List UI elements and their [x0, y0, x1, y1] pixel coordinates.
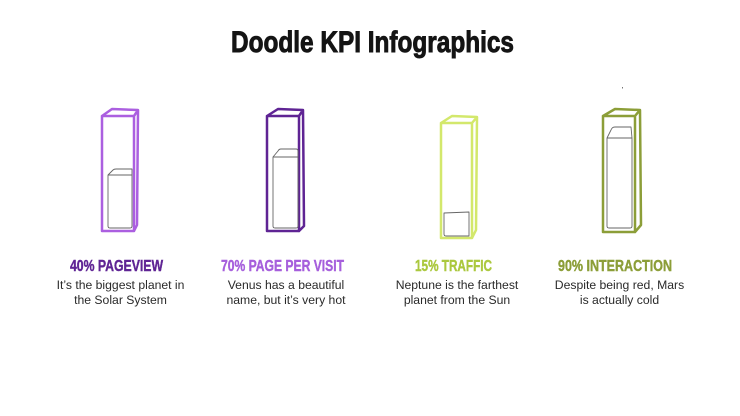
text: page per visit description: Venus has a beautiful	[228, 278, 344, 292]
icon: 15% bar	[441, 116, 477, 238]
title: Doodle KPI Infographics	[231, 26, 514, 59]
text: page per visit description: name, but it’s very hot	[226, 293, 346, 307]
panel: pageview	[57, 109, 184, 307]
text: pageview description: It’s the biggest planet in	[57, 278, 184, 292]
heading: 40% pageview: 40% PAGEVIEW	[70, 258, 163, 275]
icon: 90% bar	[603, 109, 641, 232]
icon: 40% bar	[102, 109, 138, 231]
heading: 90% interaction: 90% INTERACTION	[558, 258, 672, 275]
panel: traffic	[396, 116, 519, 307]
text: traffic description: Neptune is the farthest	[396, 278, 519, 292]
text: pageview description: the Solar System	[74, 293, 167, 307]
text: interaction description: Despite being red, Mars	[555, 278, 684, 292]
heading: 15% traffic: 15% TRAFFIC	[415, 258, 492, 275]
text: traffic description: planet from the Sun	[404, 293, 510, 307]
panel: interaction	[555, 109, 684, 307]
panel: page per visit	[221, 109, 346, 307]
heading: 70% page per visit: 70% PAGE PER VISIT	[221, 258, 344, 275]
icon: 70% bar	[267, 109, 304, 231]
text: interaction description: is actually cold	[580, 293, 659, 307]
